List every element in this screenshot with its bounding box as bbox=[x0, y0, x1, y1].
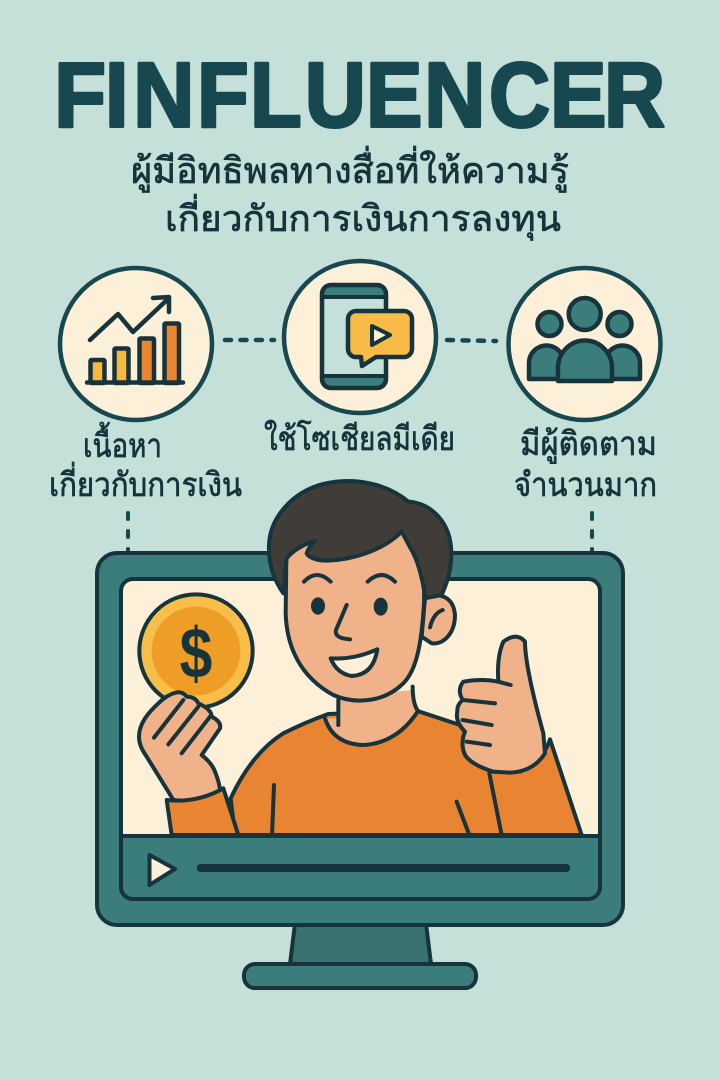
label: finance content: เกี่ยวกับการเงิน bbox=[49, 462, 242, 503]
connector: left to middle circle bbox=[225, 338, 274, 342]
label: many followers: จำนวนมาก bbox=[514, 466, 657, 503]
label: finance content bbox=[49, 422, 242, 503]
icon: phone with video bubble bbox=[284, 261, 436, 413]
subtitle: ผู้มีอิทธิพลทางสื่อที่ให้ความรู้ bbox=[131, 146, 569, 193]
face bbox=[286, 530, 425, 701]
icon: gold dollar coin: $ bbox=[180, 613, 212, 693]
connector: right label to monitor bbox=[590, 513, 594, 552]
ear bbox=[422, 595, 455, 643]
hair bbox=[269, 481, 451, 598]
subtitle bbox=[131, 146, 569, 241]
presenter character bbox=[139, 481, 582, 835]
hand holding coin bbox=[139, 692, 220, 801]
label: finance content: เนื้อหา bbox=[83, 422, 162, 464]
connector: middle to right circle bbox=[447, 340, 496, 341]
left sleeve bbox=[167, 788, 238, 835]
title: FINFLUENCER bbox=[54, 43, 665, 146]
neck and collar bbox=[325, 690, 418, 745]
icon: finance growth chart bbox=[60, 268, 212, 420]
monitor frame and screen bbox=[97, 553, 623, 925]
label: uses social media: ใช้โซเชียลมีเดีย bbox=[264, 420, 455, 457]
icon: gold dollar coin bbox=[139, 594, 253, 708]
connector: left label to monitor bbox=[126, 513, 130, 552]
hand thumbs up bbox=[457, 637, 545, 773]
video player bar bbox=[121, 836, 600, 899]
label: many followers bbox=[514, 425, 657, 503]
icon: group of followers bbox=[508, 268, 660, 420]
subtitle: เกี่ยวกับการเงินการลงทุน bbox=[165, 194, 561, 241]
facial features bbox=[304, 575, 395, 676]
monitor stand bbox=[244, 924, 476, 988]
torso and right sleeve bbox=[231, 711, 582, 835]
label: many followers: มีผู้ติดตาม bbox=[520, 425, 657, 464]
